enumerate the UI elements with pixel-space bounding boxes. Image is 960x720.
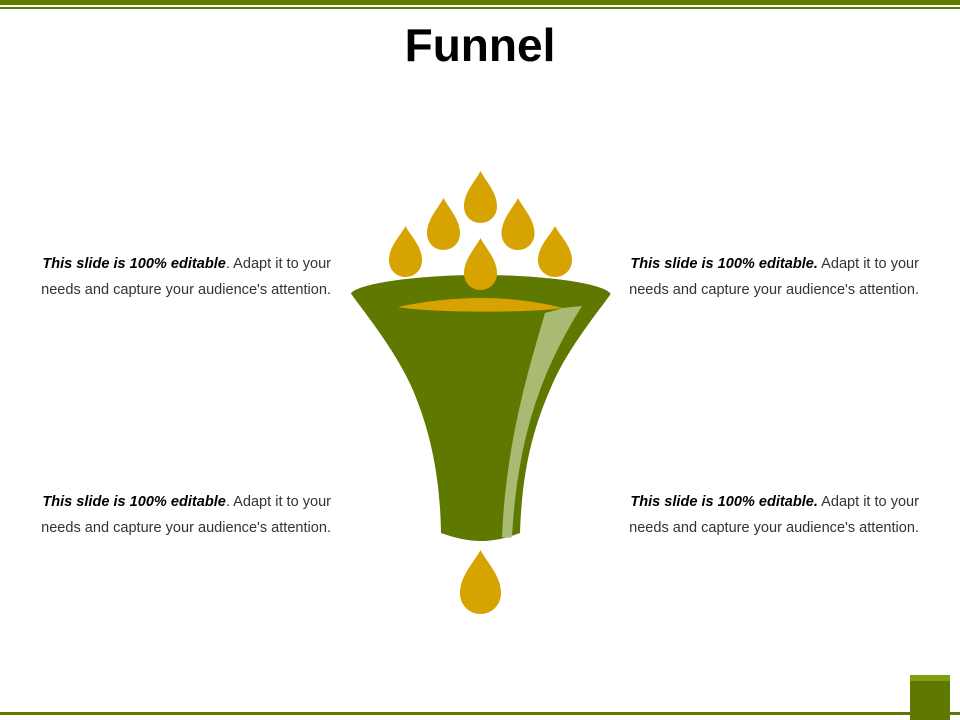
funnel body	[351, 275, 610, 541]
title: Funnel	[405, 19, 555, 71]
text block: top right: This slide is 100% editable. Adapt it to your	[630, 256, 919, 272]
text block: bottom right: This slide is 100% editable. Adapt it to your	[630, 494, 919, 510]
text block: bottom left	[41, 494, 331, 536]
text block: bottom left: needs and capture your audience's attention.	[41, 520, 331, 536]
corner square	[910, 675, 950, 720]
text block: top right: needs and capture your audience's attention.	[629, 282, 919, 298]
text block: top left: needs and capture your audience's attention.	[41, 282, 331, 298]
drop leaving funnel	[460, 550, 501, 614]
text block: bottom left: This slide is 100% editable. Adapt it to your	[42, 494, 331, 510]
funnel opening	[398, 298, 563, 312]
text block: top right	[629, 256, 919, 298]
text block: bottom right	[629, 494, 919, 536]
text block: bottom right: needs and capture your audience's attention.	[629, 520, 919, 536]
drops falling into funnel	[389, 171, 572, 290]
text block: top left: This slide is 100% editable. Adapt it to your	[42, 256, 331, 272]
text block: top left	[41, 256, 331, 298]
funnel highlight	[502, 306, 582, 538]
